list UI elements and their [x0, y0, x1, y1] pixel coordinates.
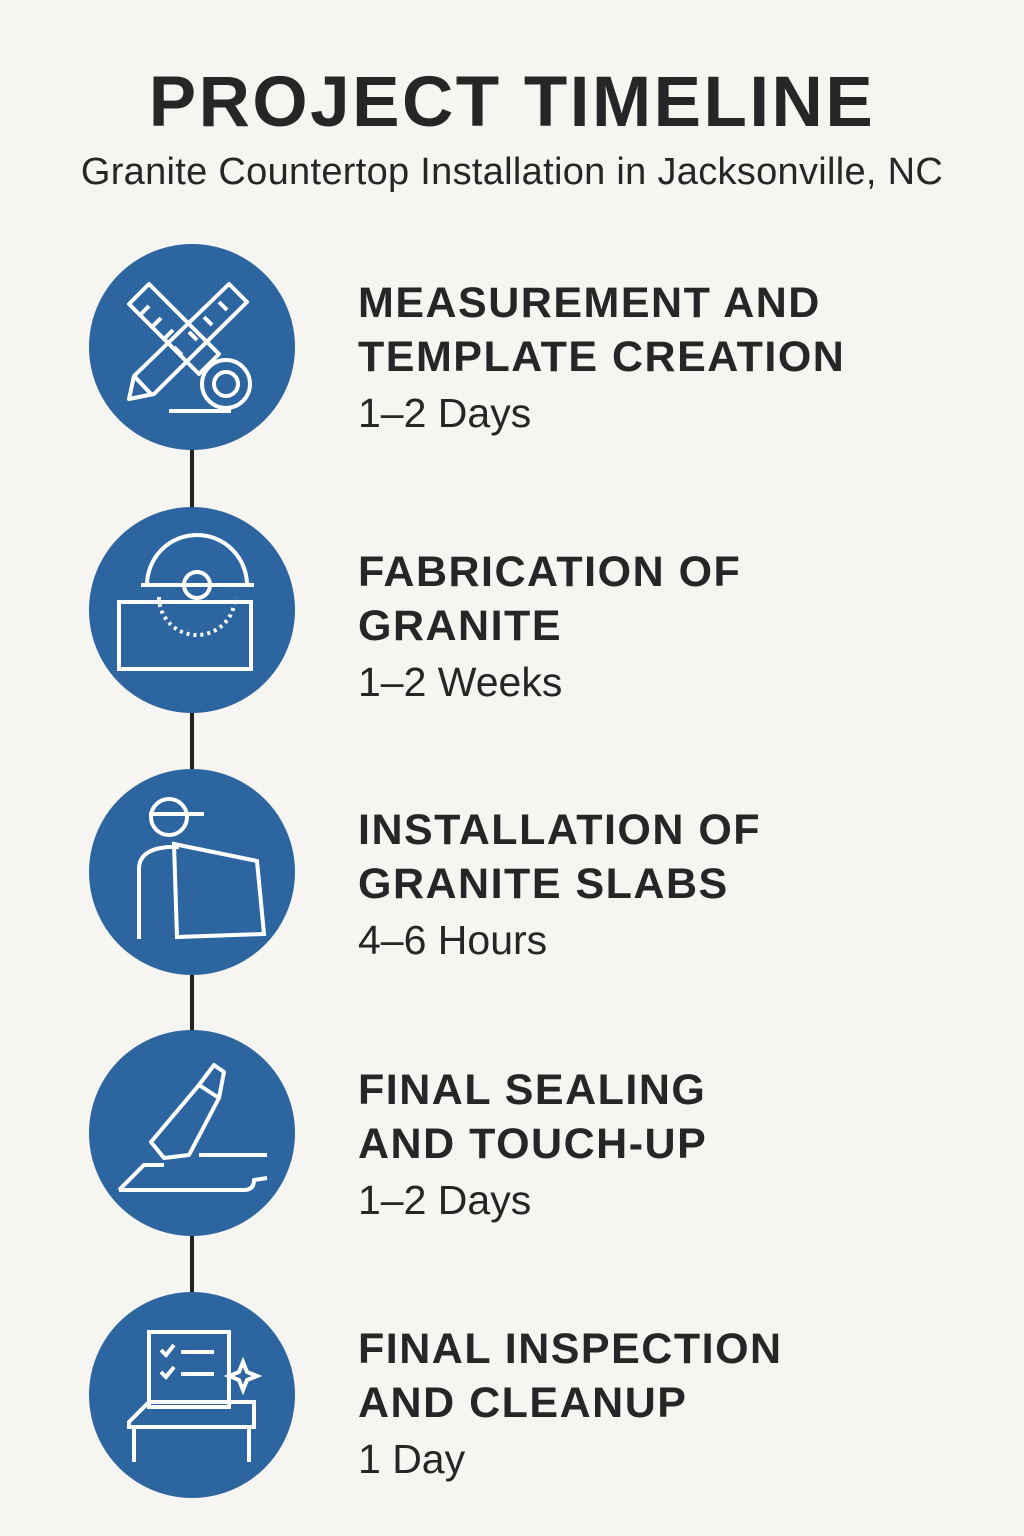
step 2 text: 1–2 Weeks — [358, 659, 562, 705]
connector line — [190, 440, 194, 1310]
step 5 text: FINAL INSPECTION — [358, 1325, 783, 1373]
step 4 text: AND TOUCH-UP — [358, 1120, 707, 1168]
step 2 text: FABRICATION OF — [358, 548, 741, 596]
step 4 text: FINAL SEALING — [358, 1066, 706, 1114]
step 3 text: 4–6 Hours — [358, 917, 547, 963]
step 5 text: 1 Day — [358, 1436, 465, 1482]
step 4 text: 1–2 Days — [358, 1177, 531, 1223]
step 1 text: TEMPLATE CREATION — [358, 333, 845, 381]
icon: sealant bottle — [89, 1030, 295, 1236]
step 2 text — [358, 548, 741, 705]
step 2 text: GRANITE — [358, 602, 562, 650]
icon: saw — [89, 507, 295, 713]
step 1 text: MEASUREMENT AND — [358, 279, 821, 327]
icon: worker with slab — [89, 769, 295, 975]
step 5 text — [358, 1325, 783, 1482]
step 1 text — [358, 279, 845, 436]
step 4 text — [358, 1066, 707, 1223]
step 3 text: INSTALLATION OF — [358, 806, 761, 854]
icon: checklist — [89, 1292, 295, 1498]
subtitle: Granite Countertop Installation in Jacksonville, NC — [81, 151, 943, 193]
step 1 text: 1–2 Days — [358, 390, 531, 436]
step 3 text: GRANITE SLABS — [358, 860, 729, 908]
icon: ruler and pencil — [89, 244, 295, 450]
step 5 text: AND CLEANUP — [358, 1379, 687, 1427]
step 3 text — [358, 806, 761, 963]
title: PROJECT TIMELINE — [149, 63, 875, 142]
